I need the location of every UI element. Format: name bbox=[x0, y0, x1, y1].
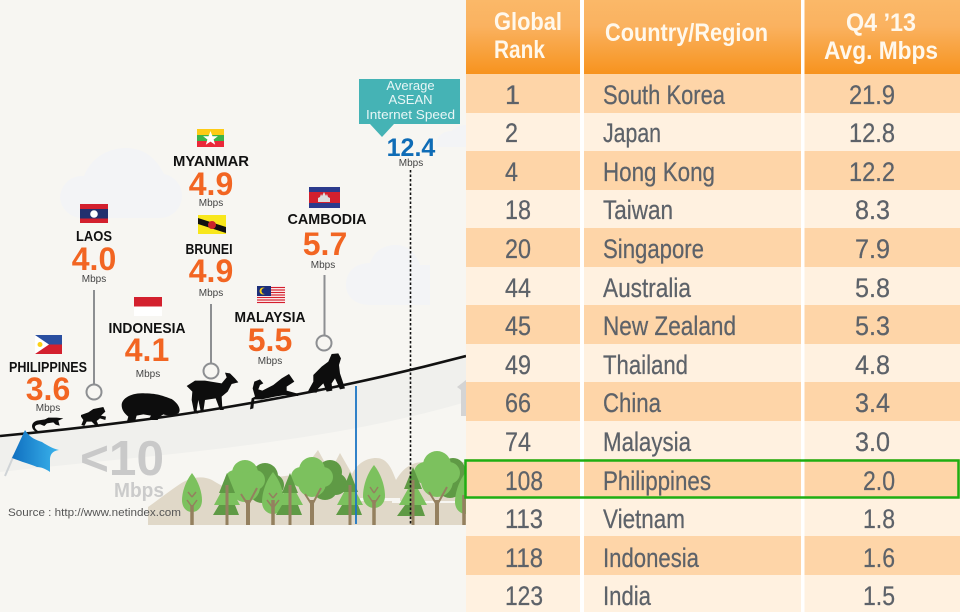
table column gaps bbox=[580, 0, 804, 612]
table rows: Australia bbox=[603, 273, 692, 303]
label: Myanmar: 4.9 bbox=[189, 166, 233, 202]
label: Brunei: BRUNEI bbox=[186, 241, 232, 258]
callout: average ASEAN speed: ASEAN bbox=[388, 92, 433, 107]
icon: goat bbox=[187, 373, 238, 413]
icon: blue flag bbox=[5, 430, 59, 476]
table header: Rank bbox=[494, 36, 545, 64]
label: Laos bbox=[72, 204, 116, 400]
shaded band under speed curve bbox=[0, 356, 466, 472]
table rows: 1.5 bbox=[863, 581, 895, 611]
table row bands bbox=[466, 74, 960, 612]
table rows: 4.8 bbox=[855, 350, 890, 380]
table rows: 18 bbox=[505, 195, 531, 225]
Philippines speed marker line bbox=[355, 386, 357, 524]
label: Brunei: 4.9 bbox=[189, 253, 233, 289]
label: Cambodia bbox=[288, 187, 367, 350]
table rows: 21.9 bbox=[849, 80, 895, 110]
table rows: Indonesia bbox=[603, 543, 700, 573]
table rows: Vietnam bbox=[603, 504, 685, 534]
source text: Source : http://www.netindex.com bbox=[8, 507, 181, 519]
speed curve bbox=[0, 356, 466, 436]
table rows: New Zealand bbox=[603, 311, 736, 341]
table rows: 108 bbox=[505, 466, 543, 496]
table rows: Japan bbox=[603, 118, 661, 148]
big label: under 10 Mbps: Mbps bbox=[114, 480, 164, 502]
label: Laos: 4.0 bbox=[72, 241, 116, 277]
label: Myanmar bbox=[173, 129, 249, 209]
label: Malaysia bbox=[234, 286, 306, 367]
table header: Country/Region bbox=[605, 19, 768, 47]
table rows: 66 bbox=[505, 388, 531, 418]
clouds bbox=[60, 125, 466, 305]
label: Indonesia: INDONESIA bbox=[108, 320, 186, 337]
label: Cambodia: CAMBODIA bbox=[288, 211, 367, 228]
panel: ASEAN internet speed illustration bbox=[0, 78, 474, 525]
label: Brunei: Mbps bbox=[199, 288, 223, 299]
icon: hippo bbox=[122, 393, 180, 422]
label: Malaysia: 5.5 bbox=[248, 322, 292, 358]
table header bbox=[466, 0, 960, 74]
table rows: 12.8 bbox=[849, 118, 895, 148]
table rows: 1.6 bbox=[863, 543, 895, 573]
icon: ape bbox=[308, 353, 345, 393]
callout: average ASEAN speed bbox=[359, 78, 460, 169]
table header: Q4 ’13 bbox=[846, 9, 916, 37]
table rows: Malaysia bbox=[603, 427, 692, 457]
label: Indonesia bbox=[108, 297, 186, 380]
table rows: 49 bbox=[505, 350, 531, 380]
table rows: 5.3 bbox=[855, 311, 890, 341]
table rows: Philippines bbox=[603, 466, 711, 496]
table rows: Taiwan bbox=[603, 195, 673, 225]
label: Philippines bbox=[9, 335, 87, 414]
label: Cambodia: Mbps bbox=[311, 260, 335, 271]
table rows: 8.3 bbox=[855, 195, 890, 225]
table rows: 2 bbox=[505, 118, 518, 148]
label: Malaysia: MALAYSIA bbox=[234, 309, 306, 326]
table rows: 123 bbox=[505, 581, 543, 611]
table rows: China bbox=[603, 388, 662, 418]
table rows: 12.2 bbox=[849, 157, 895, 187]
label: Brunei bbox=[186, 215, 233, 378]
table rows bbox=[505, 80, 895, 611]
table rows: 2.0 bbox=[863, 466, 895, 496]
label: Myanmar: Mbps bbox=[199, 198, 223, 209]
table rows: South Korea bbox=[603, 80, 726, 110]
table rows: 20 bbox=[505, 234, 531, 264]
animals on the curve bbox=[32, 353, 345, 432]
panel: global ranking table bbox=[466, 0, 960, 612]
icon: frog bbox=[81, 407, 106, 427]
table rows: 1.8 bbox=[863, 504, 895, 534]
label: Laos: LAOS bbox=[76, 228, 112, 245]
trees bbox=[182, 451, 474, 525]
table rows: 3.0 bbox=[855, 427, 890, 457]
table rows: 7.9 bbox=[855, 234, 890, 264]
big label: under 10 Mbps bbox=[82, 440, 164, 501]
label: Philippines: 3.6 bbox=[26, 371, 70, 407]
highlight box: Philippines row bbox=[466, 460, 958, 498]
label: Laos: Mbps bbox=[82, 274, 106, 285]
table rows: Hong Kong bbox=[603, 157, 715, 187]
label: Malaysia: Mbps bbox=[258, 356, 282, 367]
callout: average ASEAN speed: 12.4 bbox=[387, 134, 435, 162]
callout: average ASEAN speed: Average bbox=[386, 78, 435, 93]
label: Cambodia: 5.7 bbox=[303, 226, 347, 262]
table rows: 113 bbox=[505, 504, 543, 534]
big label: under 10 Mbps: <10 bbox=[80, 432, 164, 486]
table rows: 44 bbox=[505, 273, 531, 303]
callout: average ASEAN speed: Internet Speed bbox=[366, 107, 455, 122]
partial grey label at curve edge bbox=[457, 380, 466, 416]
icon: dog bbox=[250, 374, 298, 409]
table header: Global bbox=[494, 8, 562, 36]
table header: Avg. Mbps bbox=[824, 37, 938, 65]
table rows: Singapore bbox=[603, 234, 704, 264]
average speed marker line bbox=[410, 170, 412, 525]
icon: lizard bbox=[32, 418, 63, 432]
label: Indonesia: 4.1 bbox=[125, 332, 169, 368]
label: Indonesia: Mbps bbox=[136, 369, 160, 380]
table rows: 4 bbox=[505, 157, 518, 187]
table rows: 74 bbox=[505, 427, 531, 457]
hills bbox=[148, 450, 466, 525]
table rows: Thailand bbox=[603, 350, 688, 380]
table rows: India bbox=[603, 581, 652, 611]
table rows: 1 bbox=[505, 80, 520, 110]
table rows: 118 bbox=[505, 543, 543, 573]
table rows: 5.8 bbox=[855, 273, 890, 303]
label: Philippines: Mbps bbox=[36, 403, 60, 414]
white strips in the ground bbox=[360, 498, 462, 503]
label: Myanmar: MYANMAR bbox=[173, 153, 249, 170]
table rows: 3.4 bbox=[855, 388, 890, 418]
label: Philippines: PHILIPPINES bbox=[9, 359, 87, 376]
table rows: 45 bbox=[505, 311, 531, 341]
callout: average ASEAN speed: Mbps bbox=[399, 158, 423, 169]
